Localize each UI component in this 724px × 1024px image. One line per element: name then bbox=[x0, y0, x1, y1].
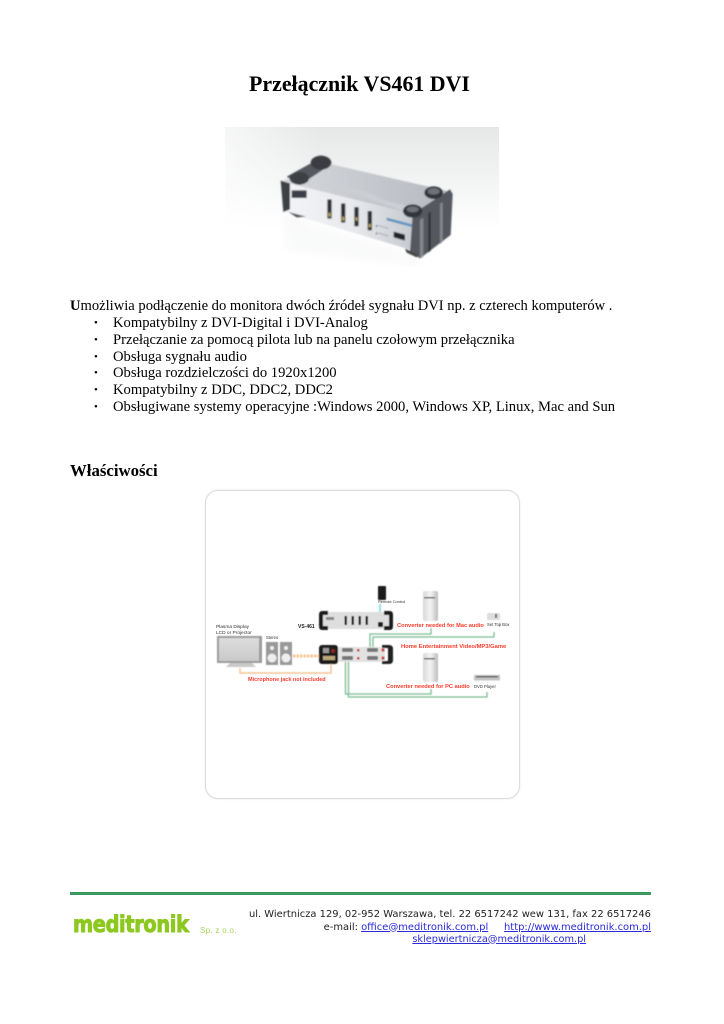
list item bbox=[94, 349, 247, 365]
footer contact links: e-mail: office@meditronik.com.pl http://www.meditronik.com.pl bbox=[324, 922, 651, 932]
right cap bbox=[410, 189, 453, 258]
feature list: • bbox=[94, 317, 98, 329]
feature list: • bbox=[94, 384, 98, 396]
DVD player bbox=[474, 675, 500, 680]
left cap bbox=[281, 181, 290, 212]
section heading: Właściwości bbox=[70, 461, 158, 480]
list item bbox=[94, 315, 368, 331]
feature list: • bbox=[94, 334, 98, 346]
footer address: ul. Wiertnicza 129, 02-952 Warszawa, tel. 22 6517242 wew 131, fax 22 6517246 bbox=[249, 908, 651, 920]
VS-461 rear unit bbox=[319, 645, 393, 664]
logo bbox=[292, 190, 307, 198]
remote control bbox=[378, 586, 386, 600]
Mac tower bbox=[423, 591, 438, 621]
title: Przełącznik VS461 DVI bbox=[249, 71, 470, 96]
label: converter PC: Converter needed for PC audio bbox=[386, 684, 470, 690]
blue remote link bbox=[379, 604, 381, 622]
label: plasma display: Plasma Display bbox=[216, 624, 250, 630]
footer logo bbox=[73, 912, 237, 938]
PC tower bbox=[423, 653, 438, 682]
list item bbox=[94, 382, 333, 398]
intro paragraph: Umożliwia podłączenie do monitora dwóch źródeł sygnału DVI np. z czterech komputerów . bbox=[70, 298, 612, 314]
feature list: • bbox=[94, 351, 98, 363]
label: home entertainment: Home Entertainment Video/MP3/Game bbox=[401, 644, 507, 650]
label: LCD or projector: LCD or Projector bbox=[216, 630, 252, 636]
feature list: Obsługiwane systemy operacyjne :Windows 2000, Windows XP, Linux, Mac and Sun bbox=[113, 399, 615, 415]
feature list: • bbox=[94, 401, 98, 413]
label: stereo: Stereo bbox=[266, 635, 279, 640]
diagram labels bbox=[216, 599, 510, 690]
label: converter Mac: Converter needed for Mac audio bbox=[397, 623, 484, 629]
monitor bbox=[217, 636, 262, 667]
top bbox=[282, 162, 450, 215]
port buttons bbox=[327, 199, 332, 219]
panel: connection diagram bbox=[205, 490, 520, 799]
footer shop email: sklepwiertnicza@meditronik.com.pl bbox=[412, 934, 586, 944]
label: remote control: Remote Control bbox=[378, 599, 405, 604]
orange cables bbox=[240, 656, 331, 673]
feature list bbox=[94, 315, 615, 415]
VS-461 front unit bbox=[319, 611, 393, 630]
list item bbox=[94, 399, 615, 415]
IR window bbox=[394, 232, 405, 241]
feet bbox=[311, 156, 331, 170]
feature list: • bbox=[94, 367, 98, 379]
label: VS-461: VS-461 bbox=[298, 624, 315, 630]
list item bbox=[94, 332, 515, 348]
green cables bbox=[346, 628, 494, 697]
list item bbox=[94, 365, 337, 381]
label: microphone jack: Microphone jack not included bbox=[248, 677, 326, 683]
label strip bbox=[387, 218, 412, 227]
product photo: VS461 switch bbox=[225, 127, 499, 260]
feature list: Obsługa sygnału audio bbox=[113, 349, 247, 365]
feature list: Kompatybilny z DVI-Digital i DVI-Analog bbox=[113, 315, 368, 331]
feature list: Kompatybilny z DDC, DDC2, DDC2 bbox=[113, 382, 333, 398]
label: set top box: Set Top Box bbox=[487, 622, 510, 627]
logo wordmark: meditronik bbox=[73, 912, 189, 938]
set top box bbox=[487, 613, 500, 620]
speakers bbox=[266, 642, 292, 665]
feature list: Obsługa rozdzielczości do 1920x1200 bbox=[113, 365, 337, 381]
front bbox=[282, 182, 417, 252]
feature list: Przełączanie za pomocą pilota lub na panelu czołowym przełącznika bbox=[113, 332, 515, 348]
footer rule bbox=[70, 892, 651, 895]
label: DVD player: DVD Player bbox=[474, 684, 496, 689]
logo suffix: Sp. z o.o. bbox=[200, 926, 237, 935]
